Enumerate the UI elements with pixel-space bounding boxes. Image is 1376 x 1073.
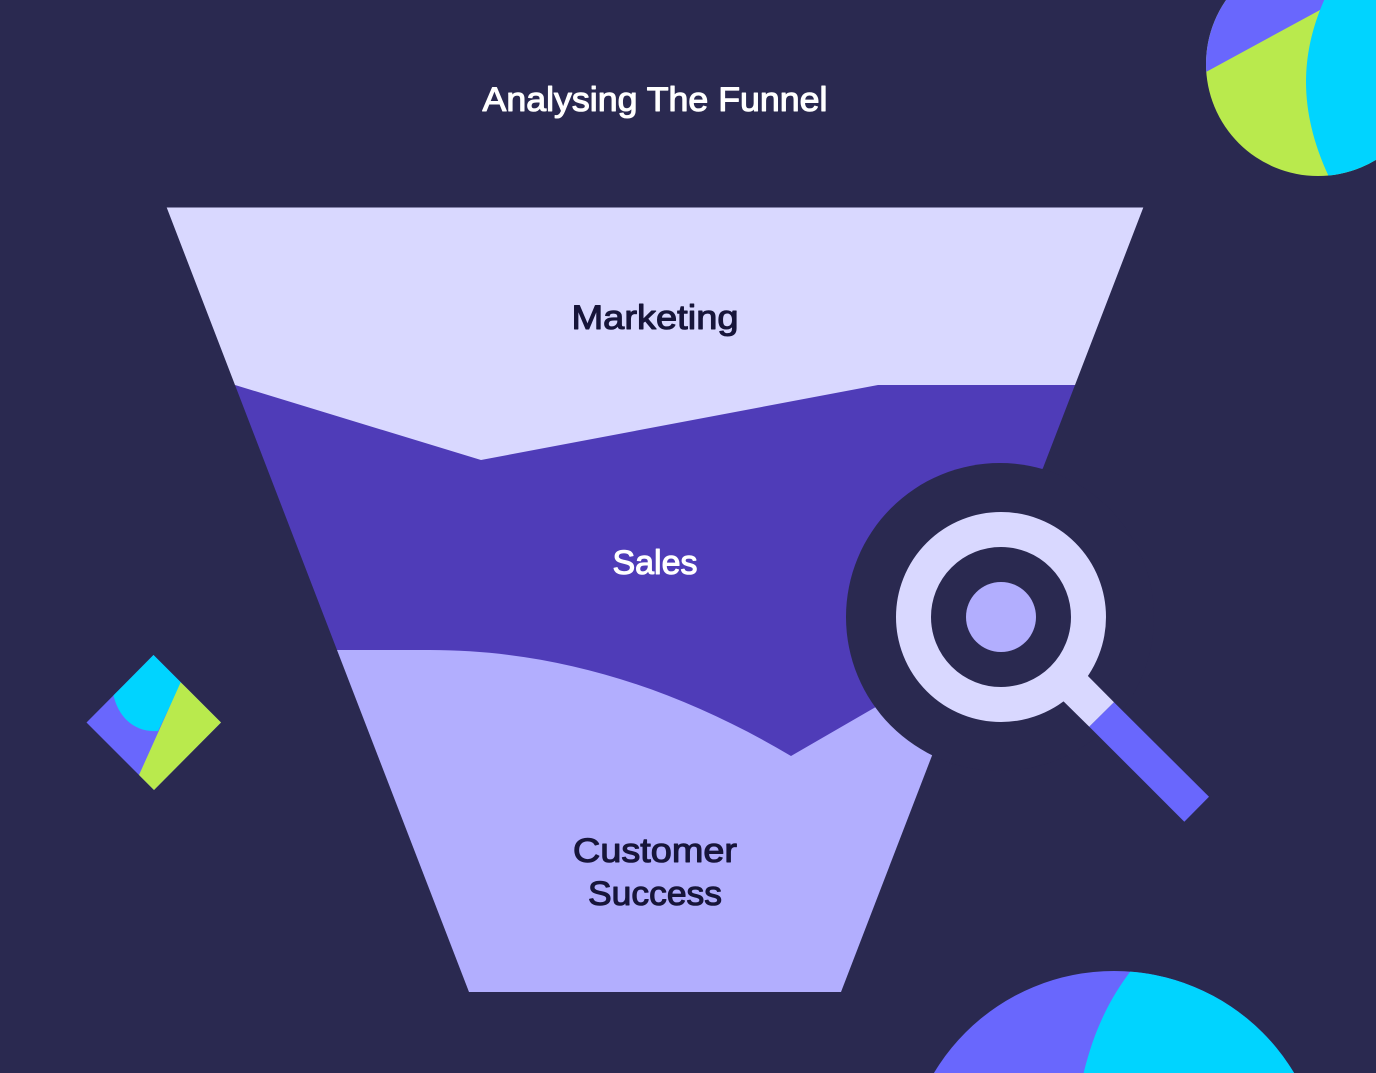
- label: customer success: [573, 832, 737, 913]
- label: marketing: Marketing: [572, 299, 738, 337]
- funnel layer: customer success: [337, 650, 960, 992]
- funnel layer: sales: [235, 385, 1075, 756]
- label: sales: Sales: [612, 544, 698, 582]
- funnel: [167, 208, 1143, 992]
- label: customer success: Success: [588, 875, 722, 913]
- label: customer success: Customer: [573, 832, 737, 870]
- decoration: bottom circle: [934, 971, 1294, 1073]
- decoration: top right circle: [1196, 0, 1376, 180]
- magnifier ring: [914, 530, 1088, 704]
- magnifier handle: [1053, 666, 1114, 727]
- funnel layer: marketing: [167, 208, 1143, 460]
- magnifier backdrop: [846, 463, 1154, 771]
- title: Analysing The Funnel: [482, 81, 828, 119]
- decoration: left diamond: [86, 655, 221, 790]
- magnifier lens centre: [966, 582, 1036, 652]
- magnifier grip: [1089, 702, 1209, 822]
- magnifying glass: [846, 463, 1209, 822]
